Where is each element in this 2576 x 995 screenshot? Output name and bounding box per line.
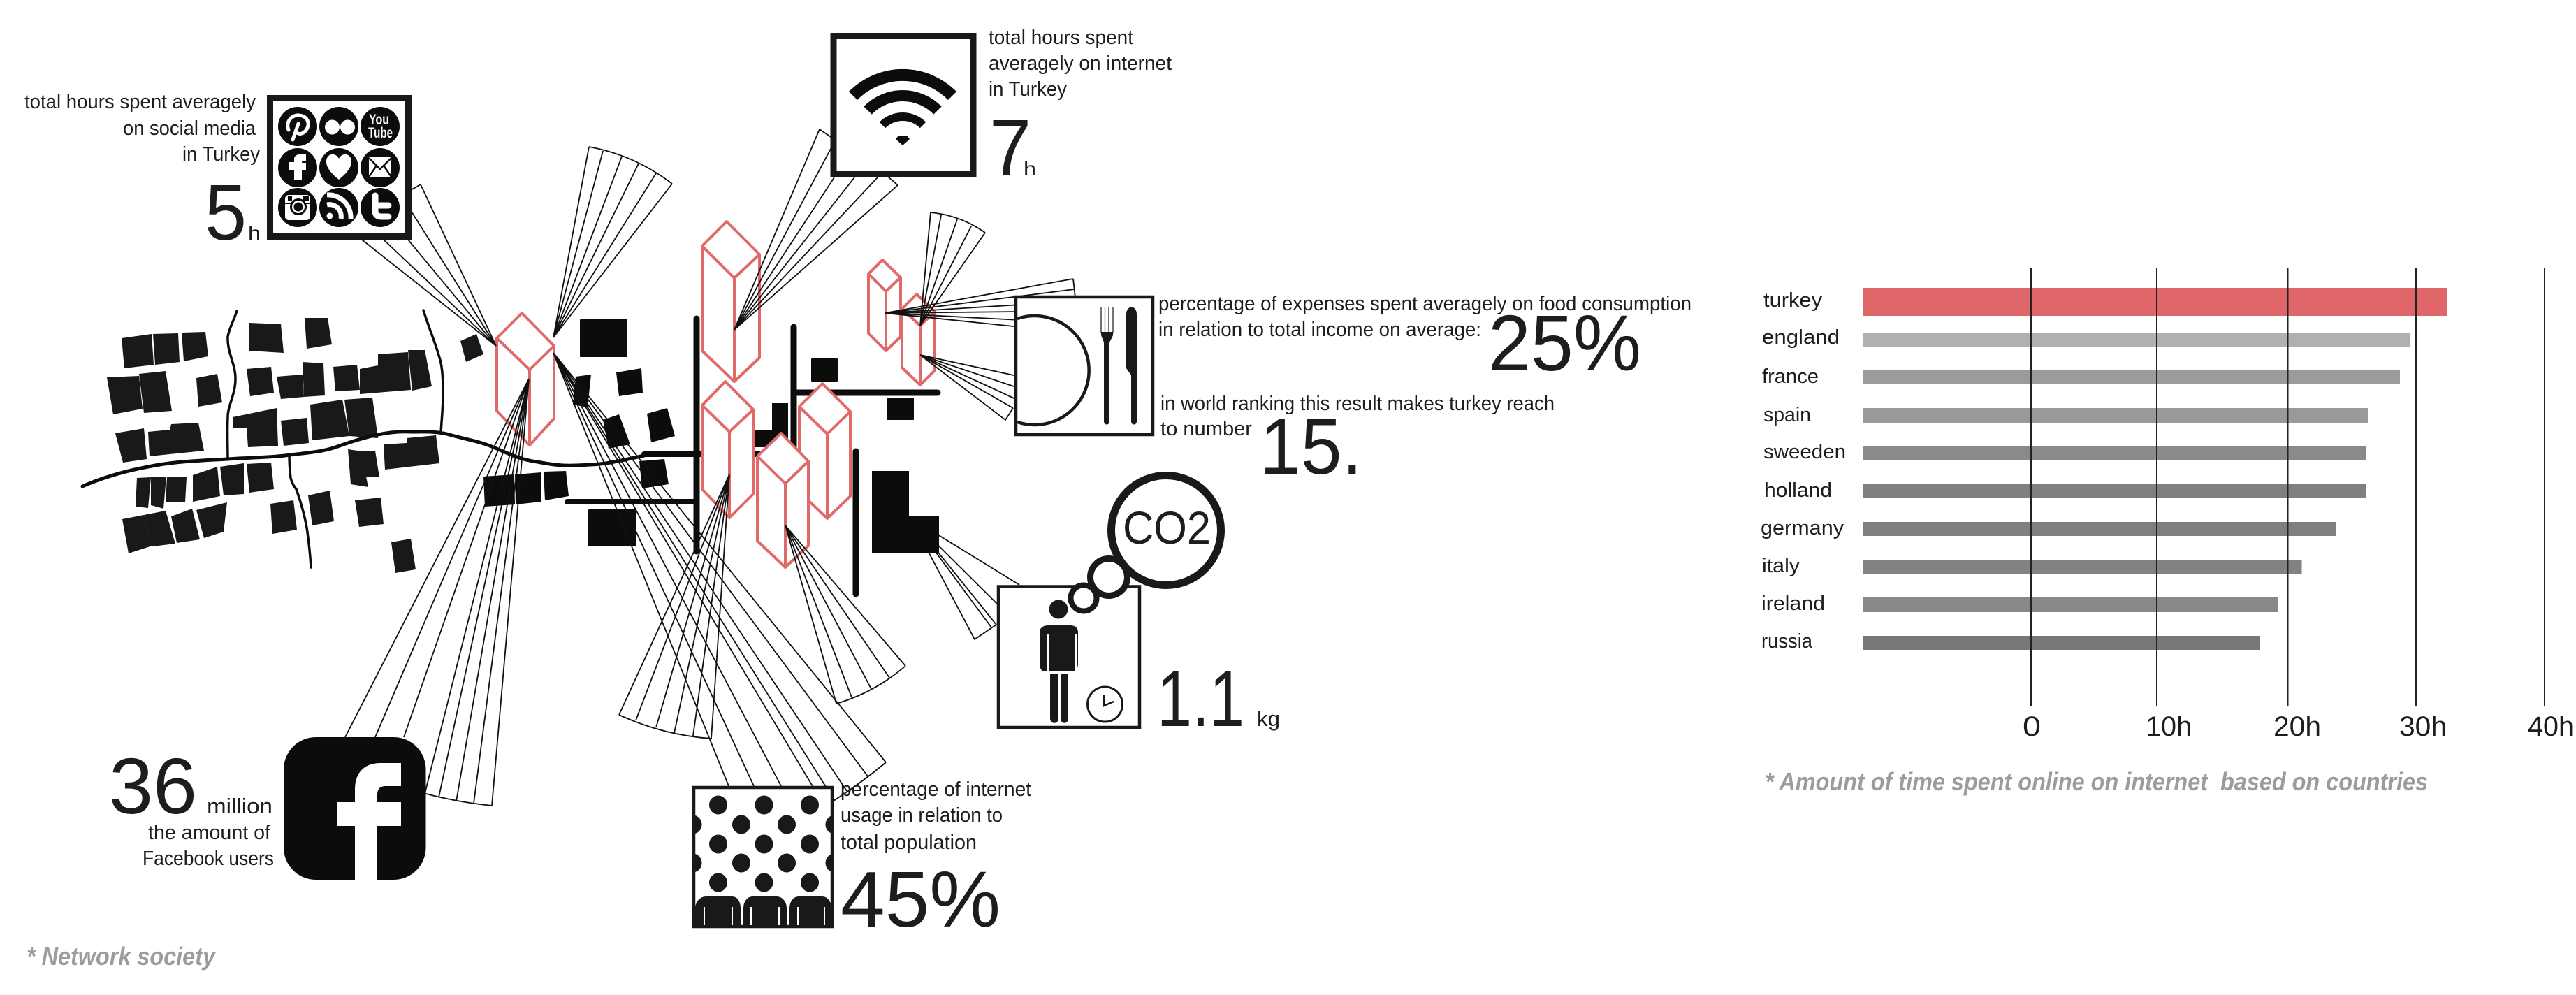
text: internet hours: h [1024, 158, 1036, 180]
text: internet usage: total population [841, 831, 977, 854]
caption: amount of time online: * Amount of time spent online on internet based on countries [1765, 767, 2428, 796]
country labels: holland [1764, 479, 1832, 502]
country labels: sweeden [1763, 441, 1846, 463]
text: social media hours: in Turkey [182, 143, 260, 166]
text: food expenses: in relation to total income on average: [1158, 319, 1481, 341]
text: internet hours: total hours spent [989, 27, 1133, 49]
text: social media hours [24, 91, 261, 256]
icon: wifi [834, 36, 973, 175]
axis labels: 40h [2528, 711, 2574, 742]
text: facebook users: the amount of [148, 822, 271, 844]
fan: wifi rays [734, 129, 898, 330]
text: social media hours: 5 [205, 168, 247, 256]
axis labels: 20h [2273, 711, 2321, 742]
icon: facebook [284, 737, 426, 880]
text: facebook users: million [207, 794, 272, 818]
text: facebook users: 36 [109, 742, 197, 830]
icon: plate with fork and knife [1016, 297, 1153, 435]
icon: person with CO2 thought bubble [998, 475, 1221, 727]
city map: thick streets [567, 319, 938, 594]
building: small tower left (red) [868, 260, 901, 351]
text: food expenses: 25% [1488, 299, 1641, 387]
country labels: ireland [1761, 593, 1825, 615]
building: social media tower (red) [497, 313, 554, 445]
icon: population dots with people [694, 787, 832, 927]
text: internet hours: 7 [989, 103, 1031, 191]
caption: network society: * Network society [27, 942, 217, 971]
text: food expenses: to number [1160, 418, 1252, 440]
icon: social media grid: You [369, 112, 389, 128]
bar chart: time online by country [1761, 268, 2574, 742]
country labels: england [1762, 326, 1840, 349]
text: internet usage: percentage of internet [841, 778, 1031, 801]
text: internet hours [989, 27, 1172, 191]
fan: upward rays from first tower [553, 147, 672, 337]
building: facebook tower (red) [702, 382, 753, 518]
icon: social media grid [270, 98, 408, 236]
country labels: spain [1763, 404, 1811, 426]
country labels: germany [1761, 517, 1844, 539]
axis labels: 0 [2023, 711, 2041, 742]
text: CO2 value: 1.1 [1157, 655, 1244, 743]
fan: food rays lower [920, 355, 1020, 420]
text: food expenses: in world ranking this result makes turkey reach [1160, 393, 1555, 415]
text: facebook users [109, 742, 274, 870]
fan: facebook rays [345, 379, 529, 806]
axis labels [2023, 711, 2574, 742]
text: internet usage: usage in relation to [841, 804, 1003, 827]
axis labels: 30h [2399, 711, 2447, 742]
fan: CO2 rays [910, 518, 1019, 639]
text: facebook users: Facebook users [143, 848, 274, 870]
city map: thin roads [82, 310, 644, 567]
fan: upward rays from small tower [920, 212, 985, 326]
country labels: france [1762, 365, 1819, 388]
text: internet usage [841, 778, 1031, 943]
icon: social media grid: Tube [368, 125, 393, 141]
text: social media hours: total hours spent averagely [24, 91, 256, 113]
text: food expenses [1158, 293, 1691, 491]
fan: long rays to population icon [553, 353, 886, 802]
building: rear tower (red) [799, 384, 850, 518]
grid lines [2031, 268, 2545, 706]
country labels [1761, 289, 1846, 653]
text: CO2 value: kg [1257, 706, 1280, 731]
fan: downward rays from population tower [785, 525, 905, 704]
city map: left building footprints [107, 318, 483, 573]
text: social media hours: on social media [123, 117, 256, 140]
text: internet hours: averagely on internet [989, 52, 1172, 75]
text: internet hours: in Turkey [989, 78, 1067, 101]
text: food expenses: 15. [1260, 402, 1362, 491]
fan: social media rays [362, 184, 496, 346]
bars [1863, 288, 2447, 650]
building: population tower (red) [757, 433, 808, 567]
building: internet tower (red) [702, 221, 759, 382]
building: small tower right (red) [902, 294, 935, 385]
country labels: russia [1761, 630, 1813, 653]
text: social media hours: h [248, 222, 261, 244]
axis labels: 10h [2146, 711, 2192, 742]
icon: person with CO2 thought bubble: CO2 [1123, 502, 1211, 553]
city map: L-shaped block [872, 471, 939, 553]
fan: food rays upper [885, 279, 1075, 327]
text: food expenses: percentage of expenses spent averagely on food consumption [1158, 293, 1691, 315]
fan: downward rays from facebook tower [619, 474, 729, 739]
text: internet usage: 45% [841, 855, 1000, 943]
city map: centre building blocks [483, 319, 914, 546]
country labels: italy [1762, 555, 1800, 577]
country labels: turkey [1763, 289, 1823, 312]
